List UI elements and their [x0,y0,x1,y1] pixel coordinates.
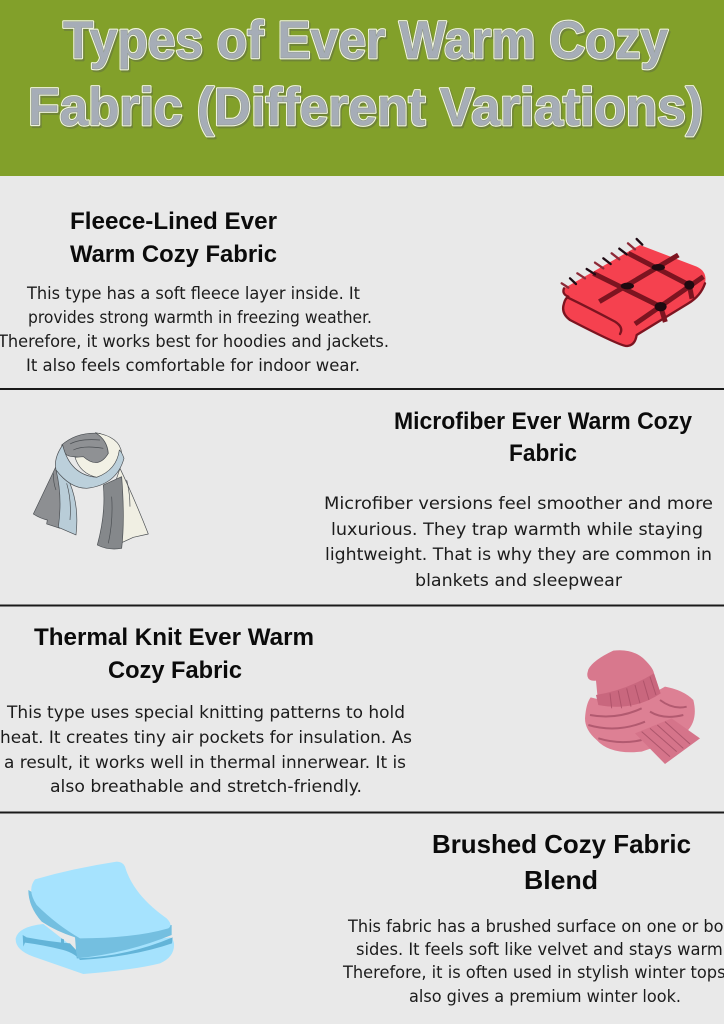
text block: thermal knit [0,703,412,796]
heading: fleece-lined: Fleece-Lined Ever [70,208,277,235]
text block: fleece-lined: Therefore, it works best for hoodies and jackets. [0,332,389,351]
text block: microfiber [324,494,713,590]
heading: fleece-lined: Warm Cozy Fabric [70,241,277,268]
heading: thermal knit [34,624,314,684]
text block: brushed blend [342,917,724,1006]
title banner [0,0,724,176]
title banner: Types of Ever Warm Cozy [63,11,668,70]
title banner: Fabric (Different Variations) [28,78,703,137]
text block: fleece-lined: This type has a soft fleece layer inside. It [26,284,361,303]
heading: brushed blend [432,829,691,895]
heading: microfiber: Microfiber Ever Warm Cozy [394,408,693,435]
heading: thermal knit: Thermal Knit Ever Warm [34,624,314,651]
title banner: Fabric (Different Variations) [28,78,703,137]
heading: microfiber: Fabric [509,440,577,467]
icon: pink knit hat and scarf [585,650,700,764]
icon: folded blue fabric [16,862,174,974]
heading: fleece-lined [70,208,277,268]
text block: microfiber: lightweight. That is why they are common in [325,545,712,564]
title banner: Types of Ever Warm Cozy [64,13,670,72]
panel: thermal knit [0,624,700,796]
text block: fleece-lined: provides strong warmth in freezing weather. [28,308,372,327]
text block: microfiber: Microfiber versions feel smoother and more [324,494,713,513]
text block: thermal knit: heat. It creates tiny air pockets for insulation. As [0,728,412,747]
heading: brushed blend: Brushed Cozy Fabric [432,829,691,859]
text block: brushed blend: sides. It feels soft like velvet and stays warm. [356,940,724,959]
title banner: Types of Ever Warm Cozy [63,11,668,70]
icon: grey and white scarf [33,433,148,549]
text block: microfiber: blankets and sleepwear [415,571,622,590]
panel: fleece-lined [0,208,706,375]
heading: thermal knit: Cozy Fabric [108,657,242,684]
heading: microfiber [394,408,693,467]
text block: fleece-lined [0,284,389,375]
text block: thermal knit: This type uses special knitting patterns to hold [6,703,405,722]
heading: brushed blend: Blend [524,865,598,895]
text block: thermal knit: a result, it works well in thermal innerwear. It is [4,753,406,772]
panel: brushed blend [16,829,724,1006]
text block: brushed blend: also gives a premium winter look. [409,987,681,1006]
text block: thermal knit: also breathable and stretch-friendly. [50,777,362,796]
text block: microfiber: luxurious. They trap warmth while staying [331,520,703,539]
text block: fleece-lined: It also feels comfortable for indoor wear. [26,356,360,375]
title banner: Fabric (Different Variations) [30,80,704,139]
panel: microfiber [33,408,713,590]
icon: red plaid blanket [562,239,706,346]
